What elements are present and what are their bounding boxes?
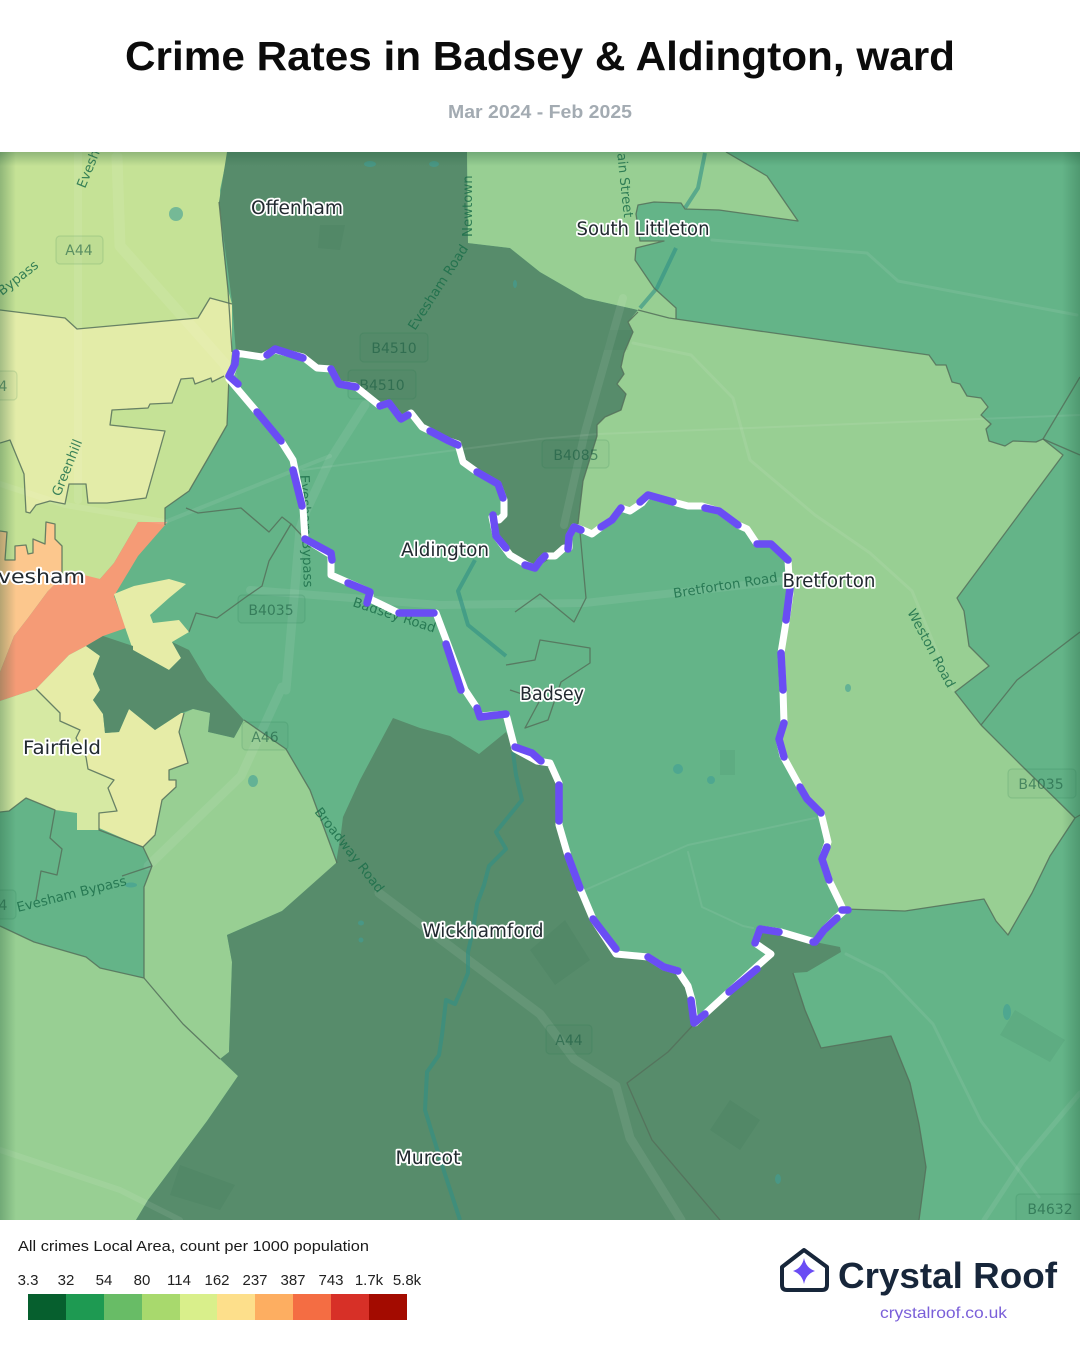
- legend scale values: 743: [318, 1272, 344, 1289]
- place names: Offenham: [251, 198, 343, 219]
- road shields: A44: [555, 1033, 583, 1049]
- road shields: A44: [65, 243, 93, 259]
- place names: Wickhamford: [422, 921, 544, 942]
- place names: Fairfield: [23, 738, 101, 759]
- area: pale yellow east of centre: [114, 579, 189, 670]
- logo url: crystalroof.co.uk: [880, 1305, 1008, 1322]
- road names: Badsey Road: [351, 596, 437, 636]
- road names: [0, 141, 957, 916]
- road names: Weston Road: [903, 607, 957, 691]
- road names: Evesham Road: [406, 242, 472, 333]
- logo wordmark: Crystal Roof: [838, 1255, 1058, 1296]
- legend scale values: 387: [280, 1272, 306, 1289]
- road shields: B4035: [1018, 777, 1064, 793]
- map base: mid-green areas: [0, 152, 1080, 1220]
- road shields: [0, 236, 1080, 1223]
- area: salmon Evesham centre: [0, 522, 167, 701]
- road shields: B4632: [1027, 1202, 1073, 1218]
- ward boundary: Badsey & Aldington: [229, 349, 848, 1023]
- legend scale values: 54: [96, 1272, 112, 1289]
- subtitle: date range: Mar 2024 - Feb 2025: [448, 101, 632, 122]
- legend scale values: 237: [242, 1272, 268, 1289]
- area: pale yellow Greenhill: [0, 298, 232, 513]
- area: dark Offenham: [219, 152, 638, 568]
- road shields: B4510: [371, 341, 417, 357]
- place names: [0, 198, 876, 1169]
- place names: Aldington: [401, 540, 489, 561]
- road shields: B4510: [359, 378, 405, 394]
- area boundary lines: [0, 152, 1080, 1220]
- place names: Murcot: [396, 1148, 460, 1169]
- area: peach Evesham west: [0, 522, 62, 672]
- area: light green south-west: [0, 926, 238, 1220]
- area: pale yellow Fairfield: [36, 646, 188, 847]
- legend scale values: 5.8k: [393, 1272, 422, 1289]
- legend scale values: 114: [167, 1272, 191, 1289]
- legend title: All crimes Local Area, count per 1000 population: [18, 1238, 369, 1255]
- roads network: [144, 238, 1080, 1220]
- boundary white line: [229, 350, 845, 1023]
- road names: Main Street: [612, 141, 635, 218]
- place names: Badsey: [520, 684, 584, 705]
- area: light green Broadway: [143, 709, 337, 1059]
- icon: house with star: [782, 1250, 827, 1290]
- logo: Crystal Roof: [782, 1250, 1058, 1322]
- road names: Evesh: [75, 148, 104, 190]
- road names: Evesham Bypass: [15, 874, 128, 916]
- map edge shading: [0, 152, 1080, 1220]
- road names: Broadway Road: [311, 805, 386, 896]
- place names: South Littleton: [576, 219, 710, 240]
- legend scale values: 32: [58, 1272, 74, 1289]
- legend: [18, 1238, 422, 1320]
- legend scale values: 3.3: [18, 1272, 38, 1289]
- road names: Evesham Bypass: [296, 475, 315, 588]
- legend colour swatches: [28, 1294, 407, 1320]
- title: Crime Rates in Badsey & Aldington, ward: [125, 33, 955, 79]
- road shields: A46: [251, 730, 279, 746]
- area: light green Bretforton: [574, 310, 1075, 935]
- area: lime north-west: [0, 152, 232, 600]
- area: pale lime Fairfield west: [0, 689, 117, 830]
- road shields: B4085: [553, 448, 599, 464]
- legend scale values: 80: [134, 1272, 150, 1289]
- dark fields: [626, 342, 630, 350]
- area: light green South Littleton: [467, 152, 798, 319]
- rivers: [425, 153, 705, 1220]
- place names: Bretforton: [782, 571, 876, 592]
- road names: Bretforton Road: [672, 571, 779, 602]
- road shields: B4035: [248, 603, 294, 619]
- area: dark Wickhamford: [136, 718, 926, 1220]
- road names: Greenhill: [50, 437, 86, 498]
- legend scale values: 1.7k: [355, 1272, 384, 1289]
- area: dark patch: [86, 636, 244, 738]
- legend scale values: [18, 1272, 422, 1289]
- ponds: [125, 161, 1011, 1184]
- boundary purple dashes: [229, 349, 848, 1023]
- legend scale values: 162: [204, 1272, 230, 1289]
- road names: Newtown: [461, 175, 476, 237]
